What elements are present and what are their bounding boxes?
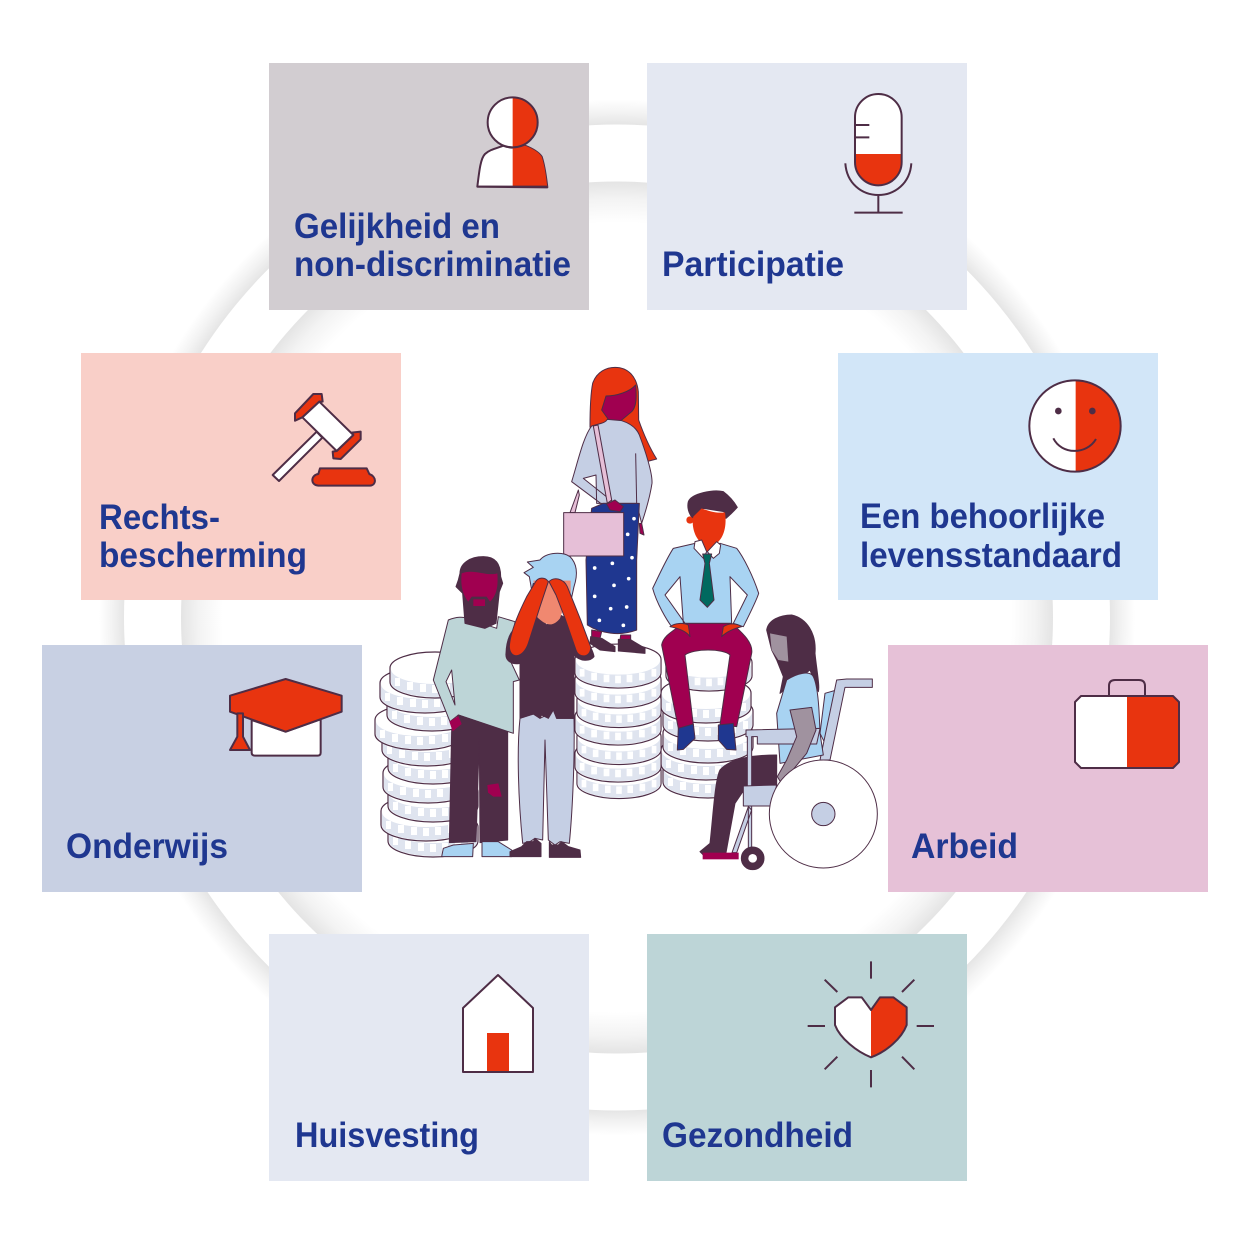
person: woman in wheelchair <box>700 615 877 870</box>
heading: Gelijkheid en non-discriminatie: non-discriminatie <box>294 245 571 284</box>
heading: Participatie: Participatie <box>662 245 844 284</box>
icon: gavel <box>273 394 375 486</box>
icon: briefcase <box>1075 680 1179 768</box>
person: standing woman with bag <box>564 367 657 653</box>
panel: Rechtsbescherming <box>81 353 401 600</box>
panel: Arbeid <box>888 645 1208 892</box>
icon: microphone <box>845 94 911 213</box>
person: man covering face <box>506 553 594 857</box>
heading: Arbeid: Arbeid <box>911 827 1018 866</box>
heading: Een behoorlijke levensstandaard: Een behoorlijke <box>860 497 1105 536</box>
person: seated man <box>653 491 759 750</box>
heading: Rechtsbescherming: Rechts- <box>99 498 220 537</box>
icon: graduation cap <box>230 679 342 756</box>
coin stack: right <box>661 647 753 798</box>
heading: Rechtsbescherming <box>99 498 307 575</box>
icon: heart with rays <box>808 961 934 1087</box>
heading: Een behoorlijke levensstandaard: levensstandaard <box>860 536 1122 575</box>
heading: Rechtsbescherming: bescherming <box>99 536 307 575</box>
icon: person half red <box>477 97 547 187</box>
panel: Participatie <box>647 63 967 310</box>
icon: house <box>463 975 533 1072</box>
heading: Een behoorlijke levensstandaard <box>860 497 1122 575</box>
panel: Gelijkheid en non-discriminatie <box>269 63 589 310</box>
heading: Gezondheid: Gezondheid <box>662 1116 853 1155</box>
panel: Huisvesting <box>269 934 589 1181</box>
background ring <box>99 100 1135 1136</box>
coin stack: left <box>375 652 480 857</box>
panel: Gezondheid <box>647 934 967 1181</box>
person: bearded man <box>433 557 519 857</box>
panel: Onderwijs <box>42 645 362 892</box>
icon: smiley <box>1029 380 1121 472</box>
heading: Onderwijs: Onderwijs <box>66 827 228 866</box>
heading: Gelijkheid en non-discriminatie <box>294 207 571 284</box>
heading: Huisvesting: Huisvesting <box>295 1116 479 1155</box>
coin stack: middle <box>575 644 661 799</box>
panel: Een behoorlijke levensstandaard <box>838 353 1158 600</box>
heading: Gelijkheid en non-discriminatie: Gelijkheid en <box>294 207 500 246</box>
illustration: people on stacks of coins <box>375 367 877 870</box>
